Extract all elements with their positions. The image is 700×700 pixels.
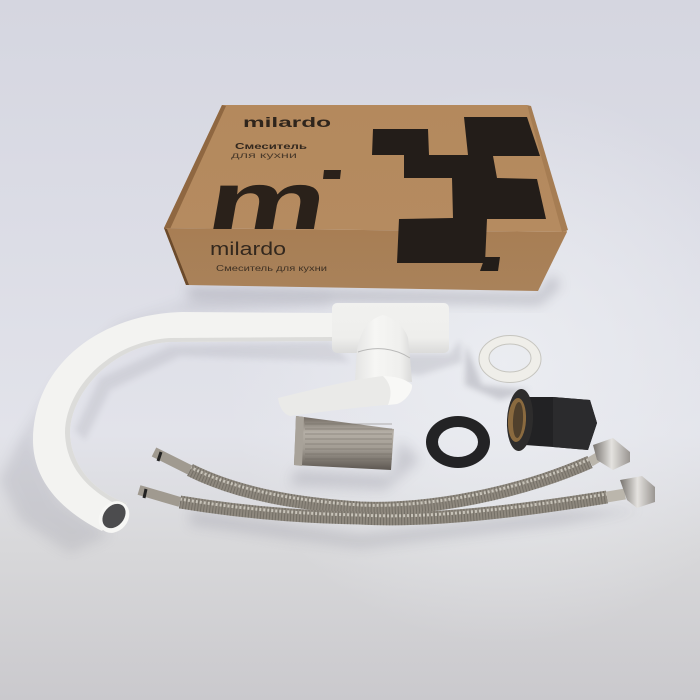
vertical neck [355, 315, 412, 382]
box flap right [527, 105, 568, 232]
black pixel pattern [372, 117, 546, 263]
box lid [164, 105, 567, 232]
lower hose left fitting [139, 490, 180, 502]
lid logo dot [323, 170, 341, 179]
lid product subtitle: для кухни [231, 151, 297, 160]
white ring gasket [479, 336, 541, 382]
lower hose right nut [607, 476, 655, 508]
upper hose left fitting [154, 452, 190, 470]
black rubber washer [426, 416, 490, 468]
threaded metal tube [294, 416, 394, 470]
white curved spout [33, 312, 334, 539]
faucet body [278, 303, 449, 416]
horizontal cylinder [332, 303, 449, 353]
front product title: Смеситель для кухни [216, 263, 327, 273]
box front [164, 228, 567, 291]
front brand name: milardo [210, 239, 286, 259]
box flap left [164, 105, 226, 229]
cardboard box [164, 105, 568, 291]
lever handle [278, 376, 412, 416]
braided hose upper [154, 438, 630, 508]
black plastic nut [505, 388, 597, 452]
spout aerator [92, 495, 136, 539]
lid product title: Смеситель [235, 142, 307, 151]
upper hose right nut [590, 438, 630, 470]
black pixel nub [480, 257, 500, 271]
lid brand name: milardo [243, 114, 331, 130]
box edge left [164, 228, 189, 285]
braided hose lower [139, 476, 655, 519]
lid big m logo: m [201, 156, 335, 247]
cast shadows [0, 275, 640, 553]
